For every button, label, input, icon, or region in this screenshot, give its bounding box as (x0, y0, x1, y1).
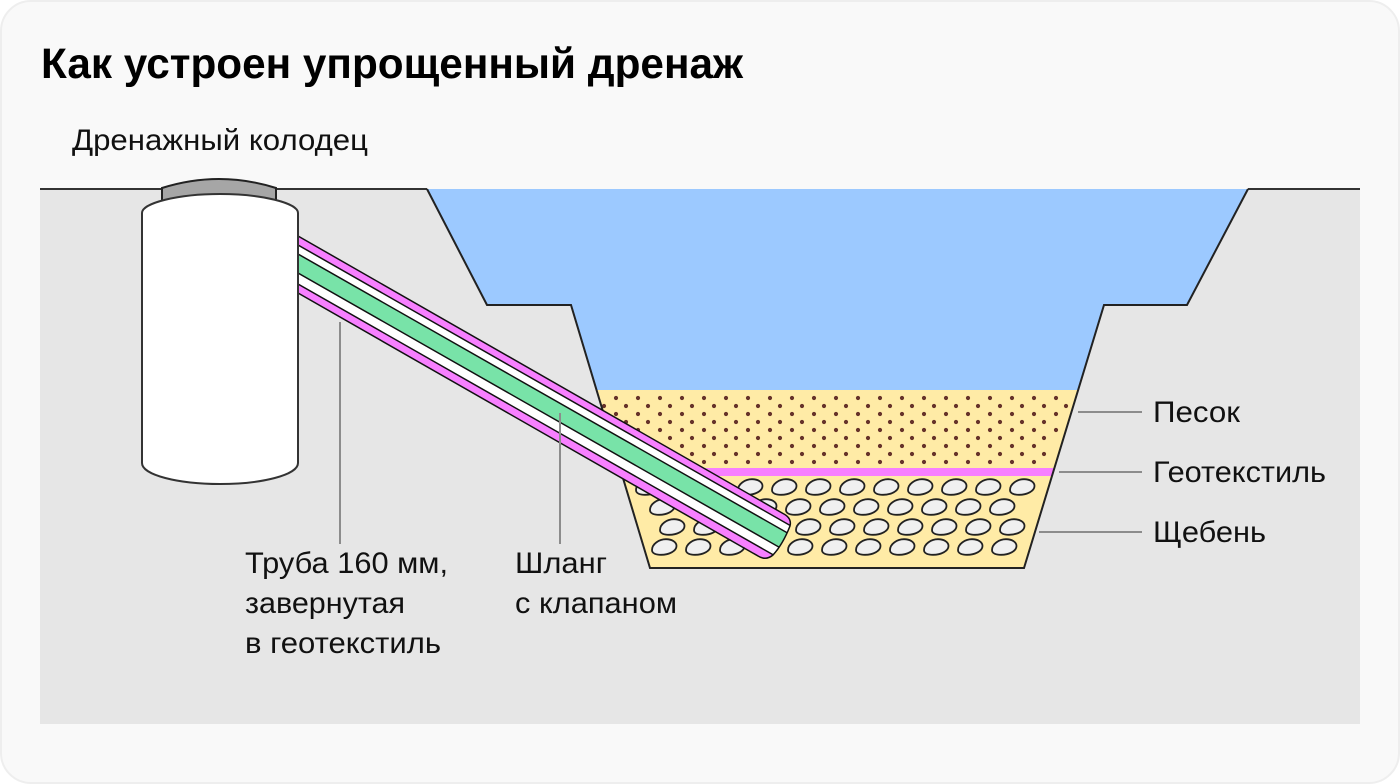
gravel layer (624, 476, 1051, 567)
leader lines (340, 322, 1142, 544)
label: geotextile: Геотекстиль (1153, 456, 1326, 489)
label: drainage well: Дренажный колодец (72, 124, 368, 157)
label: pipe: Труба 160 мм, (245, 547, 448, 580)
well body (142, 194, 298, 484)
pipe wrapped in geotextile (299, 236, 792, 559)
ground panel (40, 189, 1360, 724)
water layer (427, 189, 1248, 390)
label: hose (515, 547, 677, 620)
label: pipe: завернутая (245, 587, 405, 620)
well lid (162, 179, 276, 202)
geotextile layer (705, 468, 1054, 476)
label: pipe (245, 547, 448, 660)
label: hose: с клапаном (515, 587, 677, 620)
label: crushed stone: Щебень (1153, 516, 1266, 549)
sand layer (590, 390, 1090, 468)
trench outline (427, 189, 1248, 568)
label: hose: Шланг (515, 547, 607, 580)
label: pipe: в геотекстиль (245, 627, 441, 660)
trench layers (427, 189, 1248, 570)
title: Как устроен упрощенный дренаж (41, 40, 743, 88)
ground surface line (40, 188, 1360, 190)
label: sand: Песок (1153, 396, 1241, 429)
